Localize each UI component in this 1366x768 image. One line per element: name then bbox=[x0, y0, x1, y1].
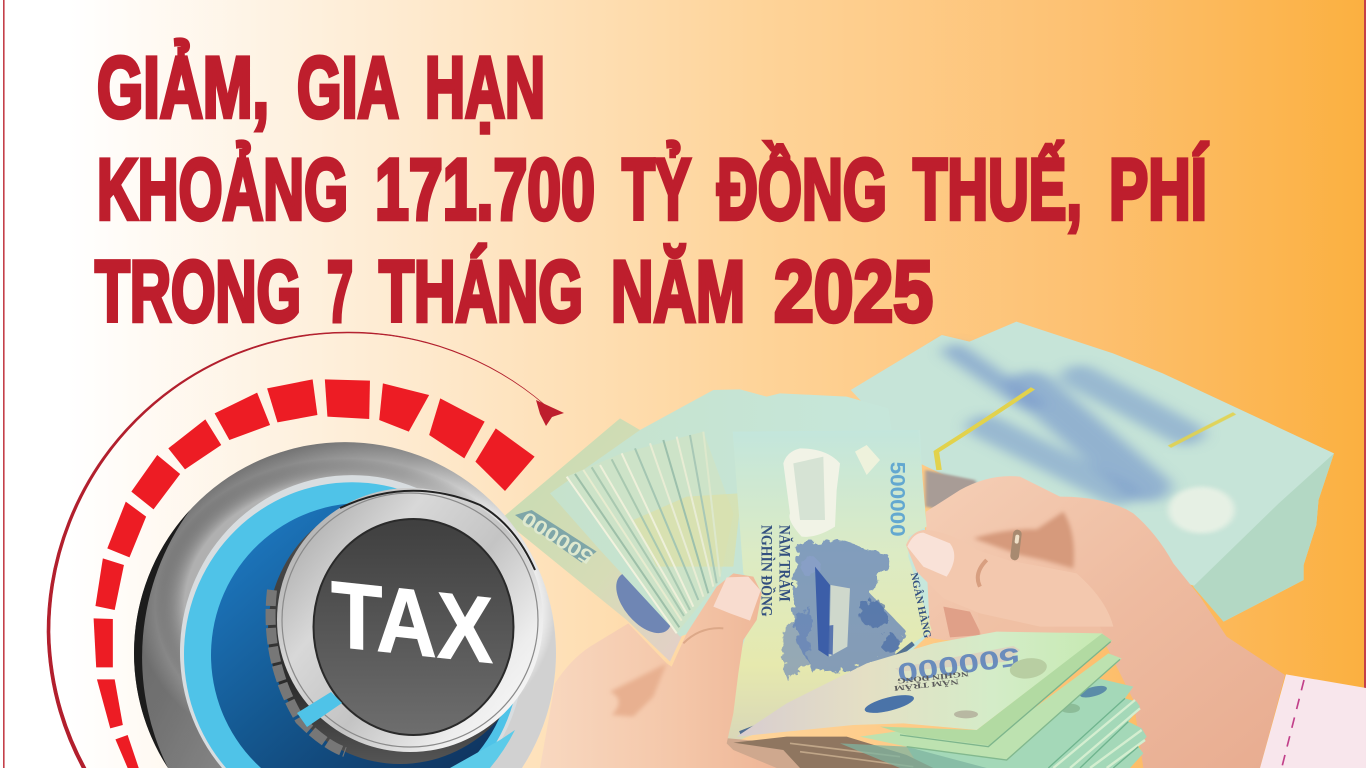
fanned banknote body bbox=[550, 389, 930, 743]
title bbox=[95, 40, 1208, 340]
knob barrel bbox=[268, 496, 532, 764]
thumbnail bbox=[907, 533, 954, 577]
fan of banknotes bbox=[502, 389, 933, 743]
knob rim line bbox=[282, 493, 538, 747]
right border line bbox=[1364, 0, 1366, 768]
base shading bbox=[134, 442, 556, 768]
tax dial knob bbox=[134, 442, 556, 768]
title: 7 bbox=[327, 244, 353, 340]
brown note edges bbox=[733, 737, 933, 768]
light ring bbox=[180, 475, 524, 768]
red scale arc line with arrow bbox=[47, 332, 564, 768]
indicator bbox=[297, 692, 342, 727]
lower folded banknotes bbox=[733, 632, 1147, 768]
title: NĂM bbox=[611, 244, 745, 340]
fan of banknotes: NGÂN HÀNG bbox=[908, 571, 933, 639]
right hand bbox=[923, 476, 1285, 768]
knob cap bbox=[314, 519, 514, 735]
lower folded banknotes: 500000 bbox=[895, 641, 1022, 688]
finger web shadow bbox=[610, 663, 667, 717]
dial base bbox=[134, 442, 556, 768]
title: KHOẢNG bbox=[97, 142, 348, 238]
arrowhead bbox=[536, 400, 564, 426]
title: TỶ bbox=[622, 142, 691, 238]
lower folded banknotes: NGHÌN ĐỒNG bbox=[896, 669, 969, 687]
main banknote bbox=[727, 430, 932, 743]
fan of banknotes: 500000 bbox=[518, 507, 597, 569]
green fold layers bbox=[860, 653, 1122, 759]
title: ĐỒNG bbox=[717, 142, 887, 238]
knob silver ring bbox=[277, 488, 543, 752]
title: TRONG bbox=[95, 244, 301, 340]
title: HẠN bbox=[425, 40, 545, 136]
title: 2025 bbox=[774, 244, 933, 340]
watermark bbox=[783, 448, 840, 537]
deep blue well bbox=[211, 503, 513, 768]
ring on finger bbox=[1015, 534, 1017, 556]
title: THÁNG bbox=[379, 244, 583, 340]
right thumb bbox=[906, 530, 1113, 627]
title: GIA bbox=[297, 40, 399, 136]
base dark left edge bbox=[134, 510, 190, 768]
light blue lower right sliver bbox=[450, 730, 515, 768]
shadow between fingers bbox=[973, 512, 1074, 568]
title: GIẢM, bbox=[97, 40, 269, 136]
knob top dark rim bbox=[340, 491, 535, 570]
red dial segments bbox=[94, 379, 535, 768]
title: THUẾ, bbox=[913, 142, 1082, 238]
shadowed palm under notes bbox=[725, 738, 865, 768]
title: 171.700 bbox=[375, 142, 595, 238]
photo: hands counting banknotes bbox=[502, 322, 1366, 768]
title: PHÍ bbox=[1109, 142, 1208, 238]
lower note stack bbox=[907, 678, 1147, 768]
blurred banknote stack in background bbox=[851, 322, 1334, 622]
left border line bbox=[3, 0, 5, 768]
lower folded banknotes: NĂM TRĂM bbox=[893, 677, 959, 694]
light blue ring bbox=[184, 482, 520, 768]
left thumbnail bbox=[713, 577, 761, 621]
fan of banknotes: NĂM TRĂM bbox=[775, 525, 792, 602]
fan of banknotes: NGHÌN ĐỒNG bbox=[758, 525, 776, 617]
tail note bbox=[502, 418, 682, 662]
TAX label: TAX bbox=[331, 561, 493, 683]
shirt cuff bbox=[1260, 674, 1366, 768]
engraving bbox=[780, 540, 905, 680]
fan of banknotes: 500000 bbox=[886, 462, 911, 537]
knob grip bbox=[271, 590, 345, 752]
left hand bbox=[540, 573, 777, 768]
top banknote bbox=[737, 632, 1102, 737]
